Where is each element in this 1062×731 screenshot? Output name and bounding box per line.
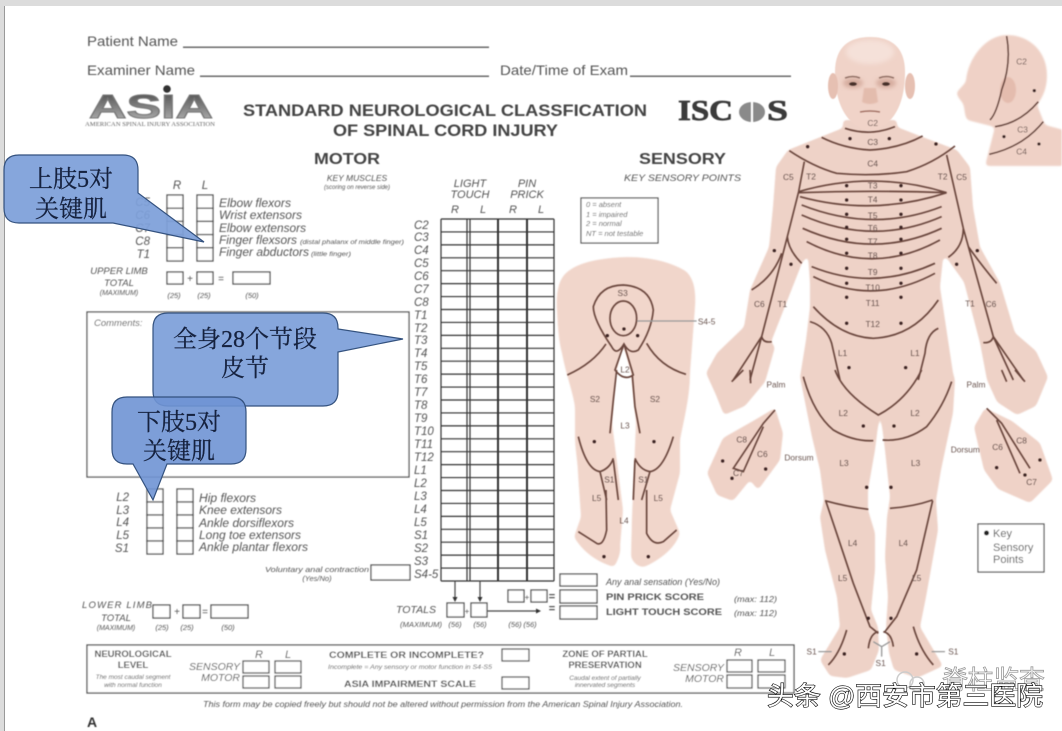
neurological level panel: ASIA IMPAIRMENT SCALE [344, 679, 476, 690]
lower leg dermatomes back view: L5 [592, 493, 602, 503]
upper limb key muscles: Wrist extensors [219, 210, 302, 222]
dermatome score grid: L2 [414, 478, 427, 490]
torso and arm dermatome lines: T1 [965, 299, 975, 309]
totals arrows and boxes: + [525, 593, 530, 602]
neurological level panel: PRESERVATION [568, 660, 642, 671]
torso and arm dermatome lines: T3 [868, 180, 878, 190]
callout: upper limb 5 pairs of key muscles: 上肢5对 [29, 166, 113, 193]
neurological level panel: L [769, 647, 775, 659]
upper limb key muscles: C5 [135, 197, 151, 209]
upper limb key muscles [135, 180, 404, 261]
totals arrows and boxes [396, 581, 555, 629]
dermatome score grid: T8 [414, 400, 428, 412]
dermatome score grid: C4 [414, 245, 429, 257]
lower limb key muscles: Knee extensors [199, 505, 282, 517]
motor heading: MOTOR [314, 151, 380, 168]
totals arrows and boxes: = [549, 591, 555, 603]
dermatome score grid: R [509, 204, 517, 216]
torso and arm dermatome lines: T2 [806, 171, 816, 181]
neurological level panel: COMPLETE OR INCOMPLETE? [329, 650, 484, 661]
totals arrows and boxes: (MAXIMUM) [400, 622, 442, 629]
key sensory points legend: Key [993, 528, 1012, 540]
torso and arm dermatome lines: C3 [867, 137, 878, 147]
neurological level panel: LEVEL [118, 660, 148, 671]
lower limb total: (25) [180, 623, 194, 632]
leg and hand dermatome lines: Dorsum [784, 452, 814, 462]
totals arrows and boxes: (56) [448, 620, 462, 629]
leg and hand dermatome lines [721, 370, 1042, 668]
ISCOS logo: ISC [678, 96, 733, 127]
upper limb total: + [187, 274, 193, 285]
dermatome lines: legs back view: S2 [650, 394, 660, 404]
leg and hand dermatome lines: S1 [807, 646, 817, 656]
callout: 28 dermatome segments: 全身28个节段 [173, 326, 317, 353]
upper limb key muscles: T1 [137, 249, 150, 261]
copyright note: This form may be copied freely but should not be altered without permission from the American Spinal Injury Association. [203, 700, 683, 709]
totals arrows and boxes: TOTALS [396, 605, 436, 616]
lower limb key muscles [115, 489, 308, 555]
upper limb total: (50) [245, 291, 259, 300]
leg and hand dermatome lines: S1 [948, 646, 959, 656]
key sensory points legend [978, 524, 1044, 572]
anterior body figure [721, 35, 1062, 668]
dermatome score grid: T2 [414, 323, 428, 335]
lower limb key muscles: Ankle dorsiflexors [198, 518, 294, 530]
lower limb key muscles: Hip flexors [199, 493, 256, 505]
dermatome score grid: L [538, 204, 544, 216]
comments box: Comments: [94, 318, 143, 329]
voluntary anal contraction [265, 565, 410, 583]
dermatome score grid: PRICK [510, 189, 544, 201]
callout: 28 dermatome segments: 皮节 [221, 355, 269, 382]
leg and hand dermatome lines: L2 [910, 408, 920, 418]
dermatome score grid: C5 [414, 258, 429, 270]
totals arrows and boxes: = [549, 603, 555, 615]
lower limb key muscles: L3 [116, 505, 130, 517]
leg and hand dermatome lines: C6 [992, 442, 1003, 452]
upper limb total: (MAXIMUM) [100, 290, 138, 297]
dermatome score grid: L3 [414, 491, 427, 503]
sensory scores [560, 574, 777, 619]
sensory heading [624, 151, 741, 183]
torso and arm dermatome lines: C4 [867, 159, 878, 169]
dermatome score grid: L5 [414, 517, 427, 529]
upper limb key muscles: Elbow extensors [219, 223, 306, 235]
dermatome score grid: C2 [414, 220, 429, 232]
sensory scores: PIN PRICK SCORE [606, 592, 704, 603]
upper limb total: TOTAL [104, 278, 134, 289]
upper limb key muscles: Finger abductors [219, 247, 309, 259]
upper limb key muscles: (distal phalanx of middle finger) [300, 240, 404, 246]
lower leg dermatomes back view: L4 [619, 515, 629, 525]
lower limb total: (50) [221, 623, 235, 632]
dermatome score grid: S3 [414, 556, 429, 568]
neurological level panel: SENSORY [673, 662, 725, 674]
torso and arm dermatome lines: T9 [868, 267, 878, 277]
dermatome score grid: S1 [414, 530, 428, 542]
lower limb key muscles: L4 [116, 517, 129, 529]
sensory heading: SENSORY [639, 151, 726, 168]
motor heading: KEY MUSCLES [327, 173, 387, 183]
leg and hand dermatome lines: Palm [966, 379, 986, 389]
torso and arm dermatome lines: C5 [783, 172, 794, 182]
neurological level panel: ZONE OF PARTIAL [562, 649, 648, 660]
dermatome score grid: R [451, 204, 459, 216]
neurological level panel: with normal function [104, 682, 162, 689]
toutiao watermark: 头条 @西安市第三医院 [767, 681, 1043, 711]
dermatome score grid: TOUCH [451, 189, 490, 201]
upper limb key muscles: Finger flexsors [219, 235, 297, 247]
dermatome score grid: C6 [414, 271, 429, 283]
upper limb total: = [218, 274, 224, 285]
skin silhouette: legs back view [557, 257, 695, 567]
torso and arm dermatome lines: T2 [938, 171, 948, 181]
leg and hand dermatome lines: C7 [733, 468, 744, 478]
dermatome lines: legs back view: S4-5 [698, 316, 716, 326]
neurological level panel: MOTOR [685, 673, 724, 685]
neurological level panel: MOTOR [201, 672, 240, 684]
callout: lower limb 5 pairs of key muscles [112, 397, 246, 500]
leg and hand dermatome lines: L4 [899, 538, 908, 548]
lower leg dermatomes back view [578, 490, 677, 558]
callout: upper limb 5 pairs of key muscles [4, 155, 204, 242]
upper limb key muscles: R [173, 180, 181, 192]
totals arrows and boxes: (56) [508, 620, 522, 629]
upper limb total: UPPER LIMB [90, 266, 148, 277]
dermatome score grid: L4 [414, 504, 427, 516]
totals arrows and boxes: + [465, 607, 470, 616]
torso and arm dermatome lines: C6 [754, 299, 765, 309]
leg and hand dermatome lines: L4 [848, 538, 858, 548]
leg and hand dermatome lines: L3 [911, 458, 921, 468]
lower limb total: TOTAL [101, 613, 131, 624]
dermatome lines: legs back view: L2 [620, 365, 630, 375]
leg and hand dermatome lines: Dorsum [951, 445, 980, 455]
lower limb key muscles: L2 [116, 492, 130, 504]
torso and arm dermatome lines: T4 [868, 195, 878, 205]
dermatome score grid: T12 [414, 452, 434, 464]
comments box [87, 312, 409, 477]
upper limb key muscles: Elbow flexors [219, 198, 291, 210]
scale legend: NT = not testable [586, 229, 643, 238]
callout: lower limb 5 pairs of key muscles: 关键肌 [143, 438, 215, 465]
leg and hand dermatome lines: S1 [876, 658, 886, 668]
dermatome lines: legs back view: S1 [604, 475, 615, 485]
callout: 28 dermatome segments [153, 313, 403, 406]
callout: upper limb 5 pairs of key muscles: 关键肌 [35, 196, 107, 223]
side view of head: C4 [1016, 146, 1027, 156]
scale legend: 1 = impaired [586, 210, 628, 219]
scale legend [581, 198, 658, 243]
lower limb total: LOWER LIMB [82, 600, 153, 611]
upper limb total: (25) [197, 291, 211, 300]
lower limb key muscles: Long toe extensors [199, 530, 301, 542]
ASIA logo [85, 85, 216, 128]
sensory heading: KEY SENSORY POINTS [624, 173, 741, 183]
dermatome score grid: C7 [414, 284, 429, 296]
title: STANDARD NEUROLOGICAL CLASSFICATION [243, 101, 647, 120]
lower leg dermatomes back view: L5 [654, 493, 663, 503]
neurological level panel: NEUROLOGICAL [94, 649, 172, 660]
dermatome score grid: T7 [414, 387, 428, 399]
ISCOS logo: S [767, 96, 788, 127]
leg and hand dermatome lines: L5 [838, 573, 848, 583]
dermatome lines: legs back view: S1 [638, 475, 649, 485]
upper limb key muscles: L [202, 180, 208, 192]
voluntary anal contraction: (Yes/No) [302, 574, 332, 583]
leg and hand dermatome lines: L2 [839, 408, 848, 418]
dermatome score grid: T4 [414, 348, 427, 360]
dermatome lines: legs back view: S3 [618, 288, 628, 298]
dermatome score grid: PIN [518, 178, 536, 190]
torso and arm dermatome lines: T8 [868, 251, 878, 261]
wechat watermark: 脊柱监查 [942, 665, 1045, 695]
leg and hand dermatome lines: C8 [736, 435, 747, 445]
dermatome score grid: T5 [414, 361, 428, 373]
dermatome score grid: S4-5 [414, 569, 439, 581]
dermatome score grid: S2 [414, 543, 429, 555]
key sensory points legend: Points [993, 554, 1024, 566]
leg and hand dermatome lines: C6 [757, 449, 768, 459]
lower limb total: = [202, 607, 208, 618]
totals arrows and boxes: (56) [523, 620, 537, 629]
scale legend: 2 = normal [585, 219, 622, 228]
torso and arm dermatome lines: T11 [866, 298, 880, 308]
totals arrows and boxes: (56) [473, 620, 487, 629]
lower limb total: + [174, 607, 180, 618]
neurological level panel: R [734, 647, 742, 659]
lower limb key muscles: Ankle plantar flexors [198, 542, 308, 554]
body silhouette [706, 120, 1048, 678]
voluntary anal contraction: Voluntary anal contraction [265, 565, 369, 574]
sensory scores: (max: 112) [734, 608, 777, 618]
torso and arm dermatome lines: T6 [868, 223, 878, 233]
dermatome score grid: T10 [414, 426, 434, 438]
leg and hand dermatome lines: L3 [839, 458, 849, 468]
neurological level panel: R [255, 649, 263, 661]
title: OF SPINAL CORD INJURY [333, 121, 559, 140]
examiner name field: Examiner Name [87, 62, 195, 78]
date time field: Date/Time of Exam [500, 62, 628, 78]
dermatome score grid: L [480, 204, 486, 216]
key sensory points legend: Sensory [993, 542, 1034, 554]
side view of head: C2 [1016, 56, 1027, 66]
dermatome score grid: T11 [414, 439, 433, 451]
upper limb key muscles: C7 [135, 223, 151, 235]
neurological level panel: Caudal extent of partially [569, 675, 642, 682]
sensory scores: LIGHT TOUCH SCORE [606, 607, 722, 618]
torso and arm dermatome lines: L1 [838, 348, 848, 358]
upper limb key muscles: C6 [135, 210, 151, 222]
dermatome lines: legs back view: S2 [590, 394, 600, 404]
ISCOS logo [678, 96, 788, 127]
neurological level panel: L [285, 649, 291, 661]
title [243, 101, 647, 140]
dorsum hands [707, 408, 1053, 503]
callout: lower limb 5 pairs of key muscles: 下肢5对 [137, 409, 221, 436]
neurological level panel: SENSORY [189, 661, 241, 673]
dermatome score grid: T9 [414, 413, 428, 425]
upper limb key muscles: C8 [135, 236, 151, 248]
lower limb key muscles: S1 [115, 543, 129, 555]
upper limb total [90, 266, 270, 300]
head [828, 37, 915, 131]
torso and arm dermatome lines: T12 [865, 319, 880, 329]
dermatome score grid [414, 178, 554, 581]
scale legend: 0 = absent [586, 200, 622, 209]
lower limb total [82, 600, 248, 632]
dermatome lines: legs back view: L3 [620, 420, 630, 430]
ASIA logo: ASIA [89, 88, 213, 125]
torso and arm dermatome lines: L1 [910, 348, 920, 358]
lower limb total: (MAXIMUM) [97, 625, 135, 632]
posterior legs figure [567, 285, 716, 558]
neurological level panel: The most caudal segment [96, 674, 172, 681]
leg and hand dermatome lines: Palm [767, 379, 786, 389]
dermatome score grid: L1 [414, 465, 427, 477]
leg and hand dermatome lines: C7 [1026, 477, 1037, 487]
figure letter: A [87, 714, 97, 730]
torso and arm dermatome lines [733, 118, 1023, 380]
dermatome score grid: T1 [414, 310, 427, 322]
dermatome score grid: C8 [414, 297, 429, 309]
torso and arm dermatome lines: T7 [868, 236, 878, 246]
dermatome score grid: T6 [414, 374, 428, 386]
torso and arm dermatome lines: T5 [868, 211, 878, 221]
neurological level panel [87, 645, 794, 693]
upper limb total: (25) [167, 291, 181, 300]
wechat watermark [897, 665, 1045, 695]
torso and arm dermatome lines: C5 [956, 172, 967, 182]
lower limb total: (25) [155, 623, 169, 632]
torso and arm dermatome lines: C2 [867, 118, 878, 128]
motor heading: (scoring on reverse side) [324, 185, 390, 191]
lower limb key muscles: L5 [116, 530, 130, 542]
torso and arm dermatome lines: T10 [865, 282, 880, 292]
dermatome score grid: LIGHT [454, 178, 487, 190]
dermatome score grid: C3 [414, 232, 429, 244]
leg and hand dermatome lines: L5 [912, 573, 922, 583]
ASIA logo: AMERICAN SPINAL INJURY ASSOCIATION [85, 122, 216, 128]
dermatome lines: legs back view [567, 285, 716, 500]
dermatome score grid: T3 [414, 335, 428, 347]
side view of head [956, 35, 1062, 166]
torso and arm dermatome lines: C6 [986, 299, 997, 309]
side view of head: C3 [1017, 125, 1028, 135]
patient name field: Patient Name [87, 33, 178, 49]
upper limb key muscles: (little finger) [311, 252, 351, 258]
leg and hand dermatome lines: C8 [1016, 435, 1027, 445]
neurological level panel: innervated segments [575, 682, 636, 689]
sensory scores: Any anal sensation (Yes/No) [605, 577, 720, 587]
neurological level panel: Incomplete = Any sensory or motor function in S4-S5 [328, 664, 492, 671]
torso and arm dermatome lines: T1 [777, 299, 788, 309]
sensory scores: (max: 112) [734, 594, 777, 604]
motor heading [314, 151, 390, 191]
